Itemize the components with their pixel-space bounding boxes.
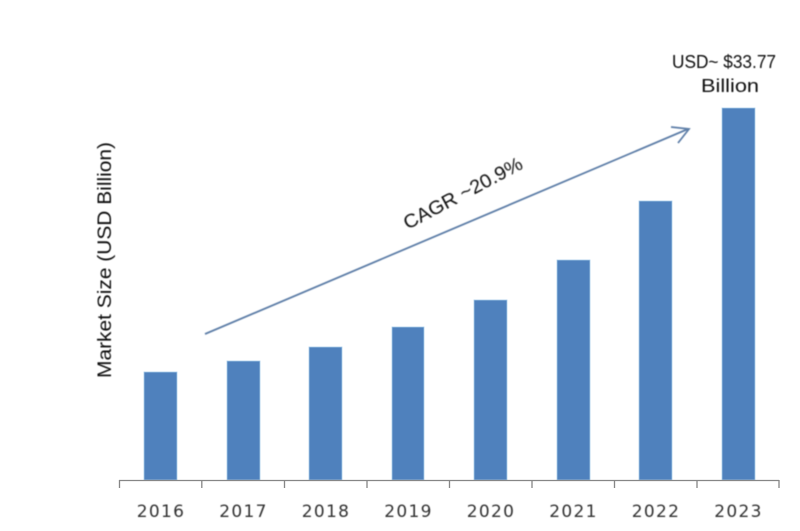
bar: 2020: [474, 300, 507, 480]
y-axis title: Market Size (USD Billion): [95, 142, 116, 378]
bar: 2017: [227, 361, 260, 480]
x-axis year labels: 2021: [549, 502, 598, 522]
bar: 2019: [392, 327, 424, 480]
x axis with tick marks: [119, 480, 779, 488]
value callout for 2023: Billion: [701, 76, 759, 96]
bar: 2023: [722, 108, 755, 480]
x-axis year labels: 2022: [632, 502, 680, 522]
x-axis year labels: 2019: [384, 502, 433, 522]
bar: 2018: [309, 347, 342, 480]
x-axis year labels: 2018: [302, 502, 350, 522]
bar: 2022: [639, 201, 672, 480]
x-axis year labels: 2016: [137, 502, 185, 522]
x-axis year labels: 2023: [714, 502, 763, 522]
bar: 2016: [144, 372, 177, 480]
x-axis year labels: 2017: [219, 502, 268, 522]
x-axis year labels: [137, 502, 763, 522]
arrow: growth trend: [205, 127, 689, 334]
CAGR label: CAGR ~20.9%: [400, 154, 527, 234]
bar: 2021: [557, 260, 590, 480]
value callout for 2023: [672, 52, 776, 96]
value callout for 2023: USD~ $33.77: [672, 52, 776, 72]
bars: [144, 108, 755, 480]
x-axis year labels: 2020: [467, 502, 515, 522]
